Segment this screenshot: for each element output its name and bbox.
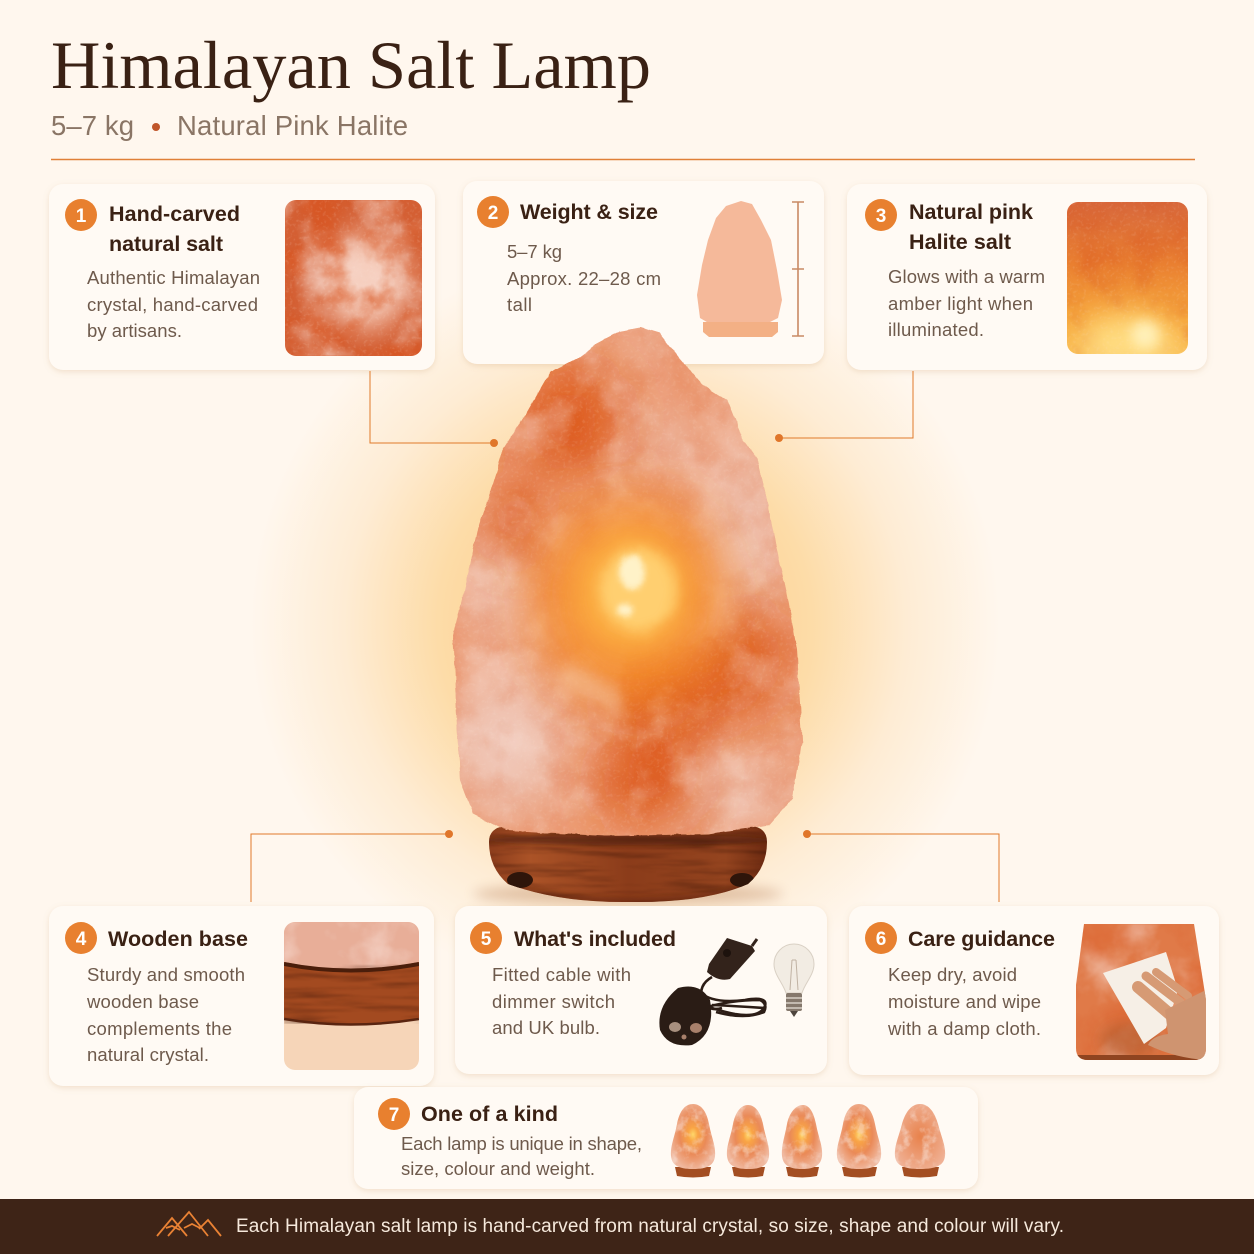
panel: natural pink halite salt: 3 xyxy=(876,206,886,227)
subtitle xyxy=(51,110,408,141)
icon: lamp silhouette xyxy=(697,201,782,337)
panel: hand-carved natural salt: 1 xyxy=(76,206,87,227)
panel: natural pink halite salt: amber light when xyxy=(888,293,1033,314)
lamp: pale mineral areas xyxy=(445,336,805,825)
panel: weight and size: 5–7 kg xyxy=(507,241,562,262)
panel: what's included: Fitted cable with xyxy=(492,964,631,985)
mini lamp 5 xyxy=(895,1104,945,1178)
panel: wooden base: Wooden base xyxy=(108,927,248,951)
panel: care guidance: Keep dry, avoid xyxy=(888,964,1017,985)
panel: care guidance: Care guidance xyxy=(908,927,1055,951)
panel: care guidance: with a damp cloth. xyxy=(887,1018,1041,1039)
mini lamp 4 xyxy=(837,1104,881,1178)
image: salt crystal texture xyxy=(285,200,422,356)
mini lamp 2 xyxy=(727,1105,769,1178)
lamp shadow xyxy=(473,883,783,905)
panel: one of a kind xyxy=(354,1087,978,1189)
connector: callout 3 xyxy=(775,371,913,442)
panel: wooden base: natural crystal. xyxy=(87,1044,209,1065)
image: wood close-up xyxy=(284,922,419,1070)
mini lamp 3 xyxy=(782,1105,822,1178)
icon: mountains xyxy=(157,1212,221,1236)
image: wiping lamp with cloth xyxy=(1076,924,1206,1060)
panel: care guidance: 6 xyxy=(876,929,886,950)
panel: what's included: 5 xyxy=(481,929,492,950)
panel: what's included xyxy=(455,906,827,1074)
panel: one of a kind: Each lamp is unique in shape, xyxy=(401,1133,642,1154)
panel: care guidance: moisture and wipe xyxy=(888,991,1041,1012)
lamp: inner light xyxy=(535,495,725,705)
image: glowing salt xyxy=(1067,202,1188,354)
panel: natural pink halite salt: illuminated. xyxy=(888,319,984,340)
lamp: deep orange areas xyxy=(493,365,781,825)
footer band xyxy=(0,1199,1254,1254)
panel: wooden base: complements the xyxy=(87,1018,232,1039)
wooden base xyxy=(489,826,767,902)
icon: light bulb xyxy=(774,944,814,1017)
connector: callout 6 xyxy=(803,830,999,902)
panel: hand-carved natural salt: Authentic Himalayan xyxy=(87,267,260,288)
panel: what's included: What's included xyxy=(514,927,676,951)
panel: one of a kind: 7 xyxy=(389,1105,399,1126)
icon: cable, dimmer and plug xyxy=(659,938,765,1045)
mini lamp 1 xyxy=(671,1104,715,1178)
footer note: Each Himalayan salt lamp is hand-carved from natural crystal, so size, shape and colour will vary. xyxy=(236,1216,1064,1237)
main lamp: salt crystal xyxy=(440,320,815,845)
panel: weight and size: Approx. 22–28 cm xyxy=(507,268,661,289)
panel: hand-carved natural salt: by artisans. xyxy=(87,320,182,341)
icon: height scale xyxy=(792,202,804,336)
subtitle: 5–7 kg xyxy=(51,110,134,141)
panel: hand-carved natural salt: crystal, hand-carved xyxy=(87,294,258,315)
panel: hand-carved natural salt: natural salt xyxy=(109,232,223,256)
panel: what's included: and UK bulb. xyxy=(492,1017,600,1038)
panel: weight and size: Weight & size xyxy=(520,200,658,224)
panel: weight and size xyxy=(463,181,824,364)
connector: callout 1 xyxy=(370,371,498,447)
panel: natural pink halite salt: Halite salt xyxy=(909,230,1011,254)
panel: natural pink halite salt: Natural pink xyxy=(909,200,1033,224)
mini lamps: crystal mottling xyxy=(672,1104,945,1169)
subtitle: Natural Pink Halite xyxy=(177,110,408,141)
panel: weight and size: tall xyxy=(507,294,532,315)
panel: one of a kind: One of a kind xyxy=(421,1102,558,1126)
panel: wooden base: 4 xyxy=(76,929,87,950)
panel: hand-carved natural salt: Hand-carved xyxy=(109,202,240,226)
connector: callout 4 xyxy=(251,830,453,902)
panel: natural pink halite salt xyxy=(847,184,1207,375)
title: Himalayan Salt Lamp xyxy=(51,27,651,103)
panel: weight and size: 2 xyxy=(488,203,498,224)
panel: wooden base: Sturdy and smooth xyxy=(87,964,245,985)
panel: natural pink halite salt: Glows with a warm xyxy=(888,266,1045,287)
panel: one of a kind: size, colour and weight. xyxy=(401,1158,595,1179)
panel: hand-carved natural salt xyxy=(49,184,435,370)
panel: wooden base xyxy=(49,906,434,1086)
panel: what's included: dimmer switch xyxy=(492,991,615,1012)
panel: care guidance xyxy=(849,906,1219,1075)
panel: wooden base: wooden base xyxy=(86,991,199,1012)
